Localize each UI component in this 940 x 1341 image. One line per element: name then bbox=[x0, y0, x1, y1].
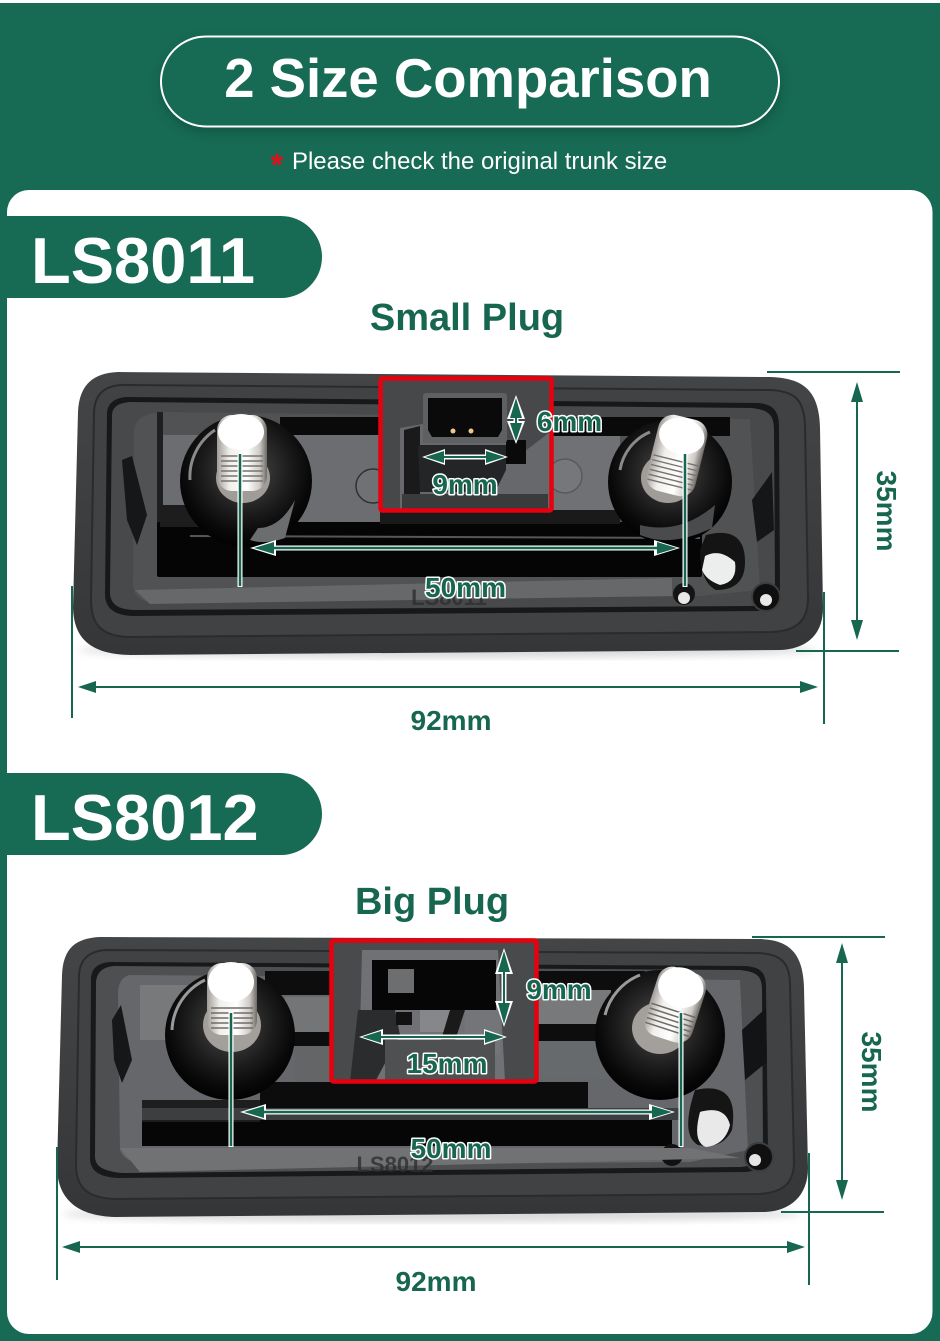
dimension: 35mm: 35mm bbox=[871, 471, 902, 551]
dimension: 15mm: 15mm bbox=[407, 1048, 487, 1079]
product photo: small plug plate: LS8011 bbox=[411, 585, 487, 610]
dimension: 50mm: 50mm bbox=[411, 1133, 491, 1164]
heading: Big Plug: Big Plug bbox=[355, 881, 509, 923]
big connector bbox=[332, 942, 536, 1082]
right bolt bbox=[608, 412, 732, 544]
subtitle note: Please check the original trunk size bbox=[292, 148, 667, 175]
header bbox=[161, 36, 779, 183]
left bolt bbox=[165, 962, 295, 1100]
highlight box: connector bbox=[380, 378, 552, 510]
dimension: 50mm: 50mm bbox=[425, 572, 506, 603]
dimension: 92mm bbox=[57, 1147, 809, 1297]
dimension: 92mm bbox=[72, 586, 824, 736]
dimension: 9mm bbox=[495, 948, 592, 1027]
small connector bbox=[380, 380, 550, 512]
dimension: 35mm: 35mm bbox=[856, 1032, 887, 1112]
title pill bbox=[161, 36, 779, 130]
product photo: big plug plate bbox=[57, 937, 808, 1222]
dimension: 6mm: 6mm bbox=[537, 406, 602, 437]
dimension: 92mm: 92mm bbox=[411, 705, 491, 736]
dimension: 9mm: 9mm bbox=[432, 469, 498, 500]
left bolt bbox=[180, 414, 312, 547]
dimension: 6mm bbox=[507, 395, 602, 444]
dimension: 35mm bbox=[752, 937, 887, 1212]
right bolt bbox=[595, 961, 725, 1100]
dimension: 15mm bbox=[359, 1029, 507, 1079]
model tab LS8011: LS8011 bbox=[31, 224, 255, 297]
subtitle note: * bbox=[271, 147, 284, 183]
title pill: 2 Size Comparison bbox=[224, 48, 712, 109]
panel: LS8011 bbox=[0, 216, 902, 736]
dimension: 92mm: 92mm bbox=[396, 1266, 476, 1297]
model tab LS8011 bbox=[0, 216, 322, 298]
product photo: small plug plate bbox=[73, 372, 823, 658]
dimension: 50mm bbox=[231, 1012, 681, 1164]
model tab LS8012 bbox=[0, 773, 322, 855]
highlight box: connector bbox=[332, 940, 536, 1082]
dimension: 35mm bbox=[767, 372, 902, 651]
dimension: 9mm bbox=[422, 449, 508, 500]
dimension: 50mm bbox=[240, 453, 685, 603]
panel: LS8012 bbox=[0, 773, 887, 1297]
model tab LS8012: LS8012 bbox=[31, 781, 259, 854]
dimension: 9mm: 9mm bbox=[526, 974, 592, 1005]
heading: Small Plug: Small Plug bbox=[370, 297, 564, 339]
product photo: big plug plate: LS8012 bbox=[356, 1152, 434, 1177]
